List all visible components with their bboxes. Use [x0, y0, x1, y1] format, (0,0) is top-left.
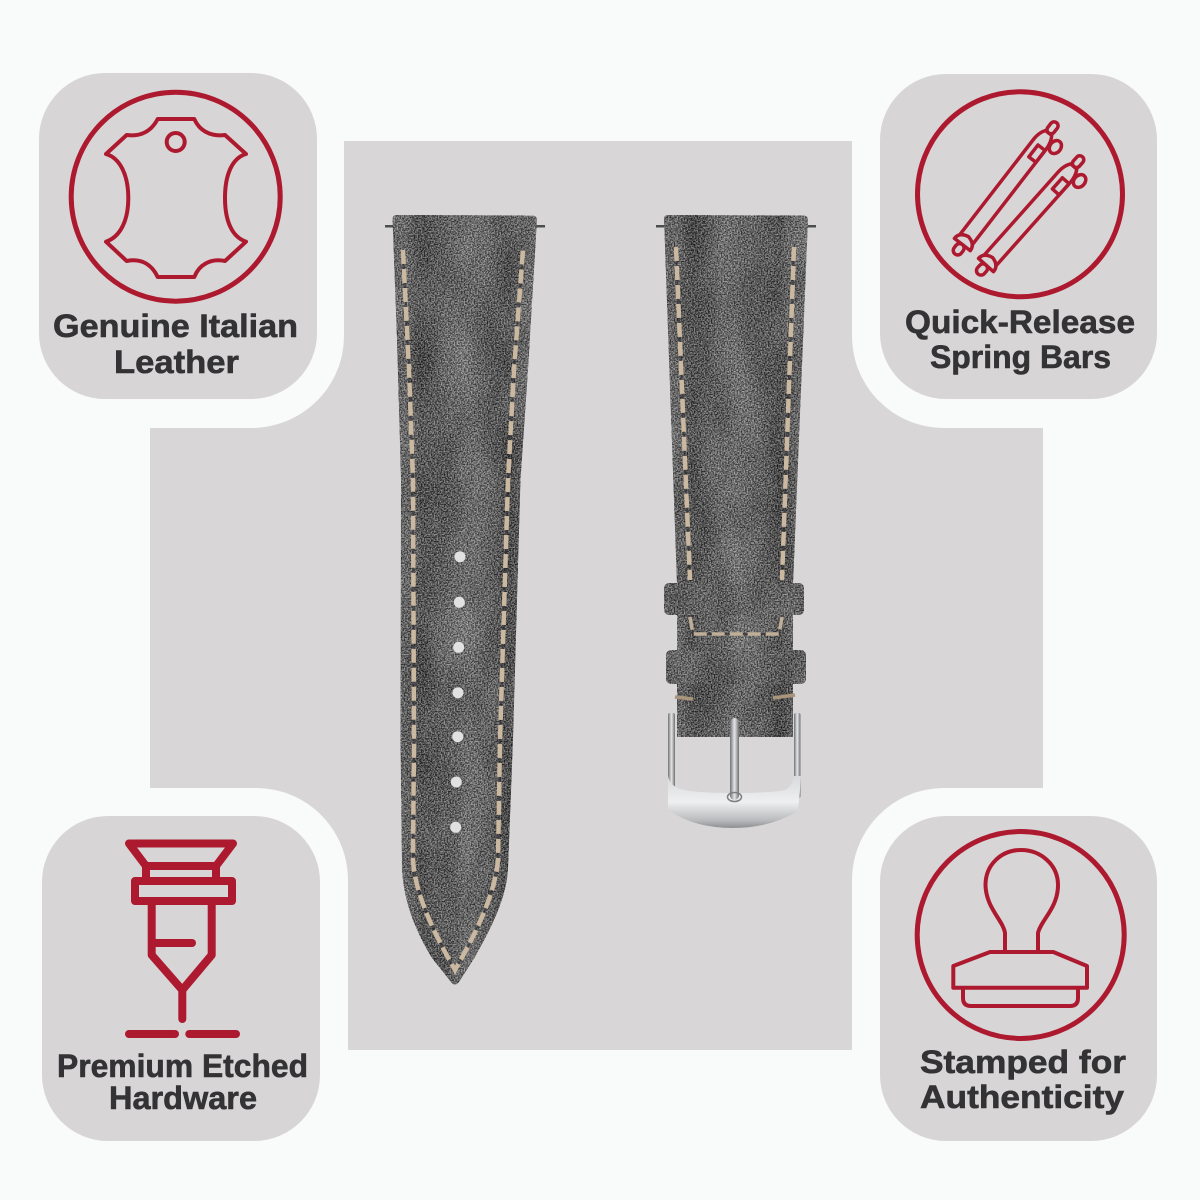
- panel: quick-release spring bars: [880, 74, 1157, 399]
- label: premium etched hardware: Premium Etched: [57, 1048, 308, 1084]
- keeper loops: [664, 583, 806, 684]
- icon: rubber stamp: [917, 832, 1124, 1038]
- panel: genuine italian leather: [39, 73, 317, 399]
- label: quick-release spring bars: Spring Bars: [930, 339, 1111, 375]
- label: genuine italian leather: Leather: [114, 344, 239, 380]
- label: stamped for authenticity: Authenticity: [920, 1079, 1124, 1115]
- label: premium etched hardware: Hardware: [109, 1080, 257, 1116]
- panel: stamped for authenticity: [880, 816, 1157, 1141]
- label: genuine italian leather: [53, 308, 298, 380]
- panel: premium etched hardware: [42, 816, 320, 1141]
- icon: etching machine: [129, 844, 236, 1034]
- label: genuine italian leather: Genuine Italian: [53, 308, 298, 344]
- label: premium etched hardware: [57, 1048, 308, 1116]
- label: stamped for authenticity: Stamped for: [920, 1044, 1126, 1080]
- icon: spring bars: [918, 92, 1122, 297]
- buckle: [668, 713, 800, 828]
- left watch strap: [385, 215, 545, 984]
- right watch strap with keepers and buckle: [656, 215, 816, 828]
- label: quick-release spring bars: Quick-Release: [905, 304, 1135, 340]
- label: quick-release spring bars: [905, 304, 1135, 375]
- central backdrop panel: [150, 141, 1043, 1050]
- icon: leather hide: [71, 92, 280, 301]
- label: stamped for authenticity: [920, 1044, 1126, 1115]
